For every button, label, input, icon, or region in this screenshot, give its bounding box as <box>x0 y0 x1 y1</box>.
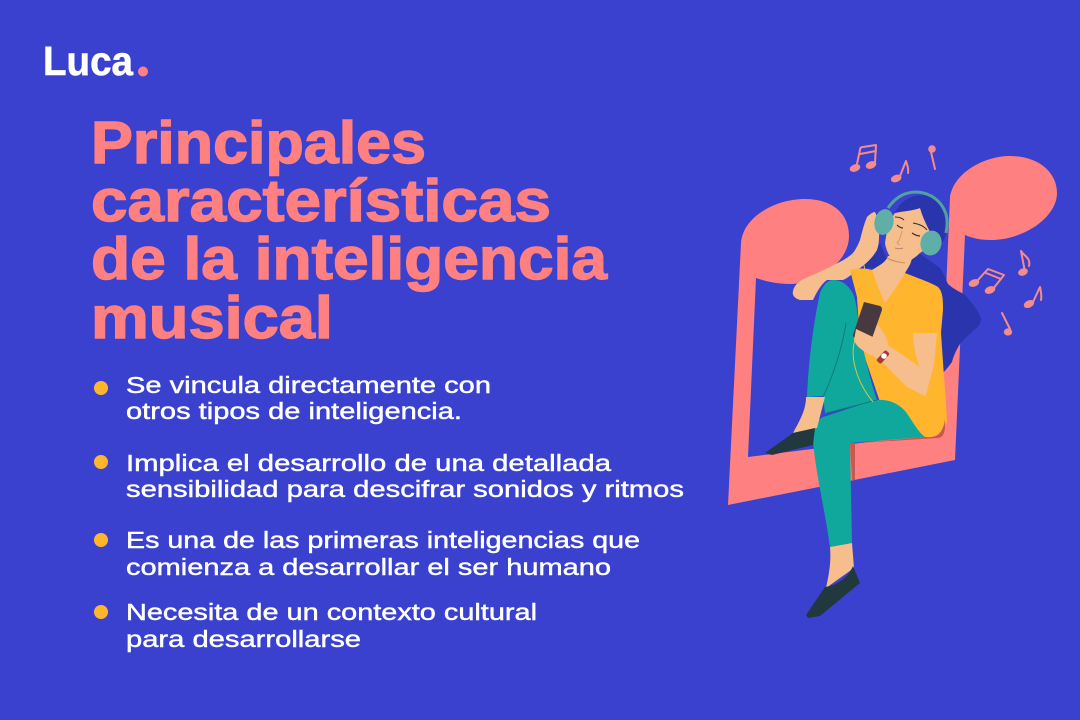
bullet 3 <box>94 527 640 580</box>
icon: small note right 4 <box>1002 313 1012 336</box>
logo: Luca: Luca <box>43 38 134 84</box>
shadow under figure <box>850 420 945 481</box>
bullet list <box>94 372 684 652</box>
illustration: woman listening to music <box>765 192 981 618</box>
phone <box>853 302 882 343</box>
icon: small note top middle <box>890 161 908 184</box>
seated leg (thigh and bent knee) <box>813 400 925 547</box>
bullet 2: sensibilidad para descifrar sonidos y ritmos <box>126 476 684 502</box>
neck <box>872 256 912 303</box>
face <box>885 208 934 262</box>
fingers over phone <box>854 329 873 348</box>
shirt <box>850 268 947 437</box>
title: de la inteligencia <box>91 226 608 292</box>
bullet 1 <box>94 372 491 424</box>
raised leg <box>807 280 877 413</box>
raised arm <box>793 212 879 300</box>
watch <box>876 350 890 364</box>
icon: small note top left <box>849 145 877 173</box>
title: musical <box>91 285 333 351</box>
headphones <box>872 192 947 257</box>
title <box>91 110 608 351</box>
bullet 4 <box>94 599 537 652</box>
bullet 4: Necesita de un contexto cultural <box>126 599 537 625</box>
facial features <box>887 217 927 263</box>
bullet 2: Implica el desarrollo de una detallada <box>126 450 612 476</box>
title: Principales <box>91 110 426 176</box>
bullet 3: comienza a desarrollar el ser humano <box>126 554 611 580</box>
bullet 2 <box>94 450 684 502</box>
back hair <box>900 250 981 378</box>
bullet 1: otros tipos de inteligencia. <box>126 398 462 424</box>
hair top <box>895 195 947 242</box>
illustration: large musical note background <box>728 156 1057 505</box>
earphone wire <box>853 265 890 402</box>
icon: small note right 2 <box>1017 251 1029 277</box>
bottom skin and shoes <box>793 397 825 433</box>
icon: small note top right <box>928 145 936 169</box>
bullet 1: Se vincula directamente con <box>126 372 491 398</box>
bullet 4: para desarrollarse <box>126 626 361 652</box>
icon: small note right 1 <box>968 269 1004 295</box>
arm with phone <box>854 325 937 396</box>
bullet 3: Es una de las primeras inteligencias que <box>126 527 640 553</box>
title: características <box>91 168 551 234</box>
icon: small note right 3 <box>1022 287 1041 310</box>
